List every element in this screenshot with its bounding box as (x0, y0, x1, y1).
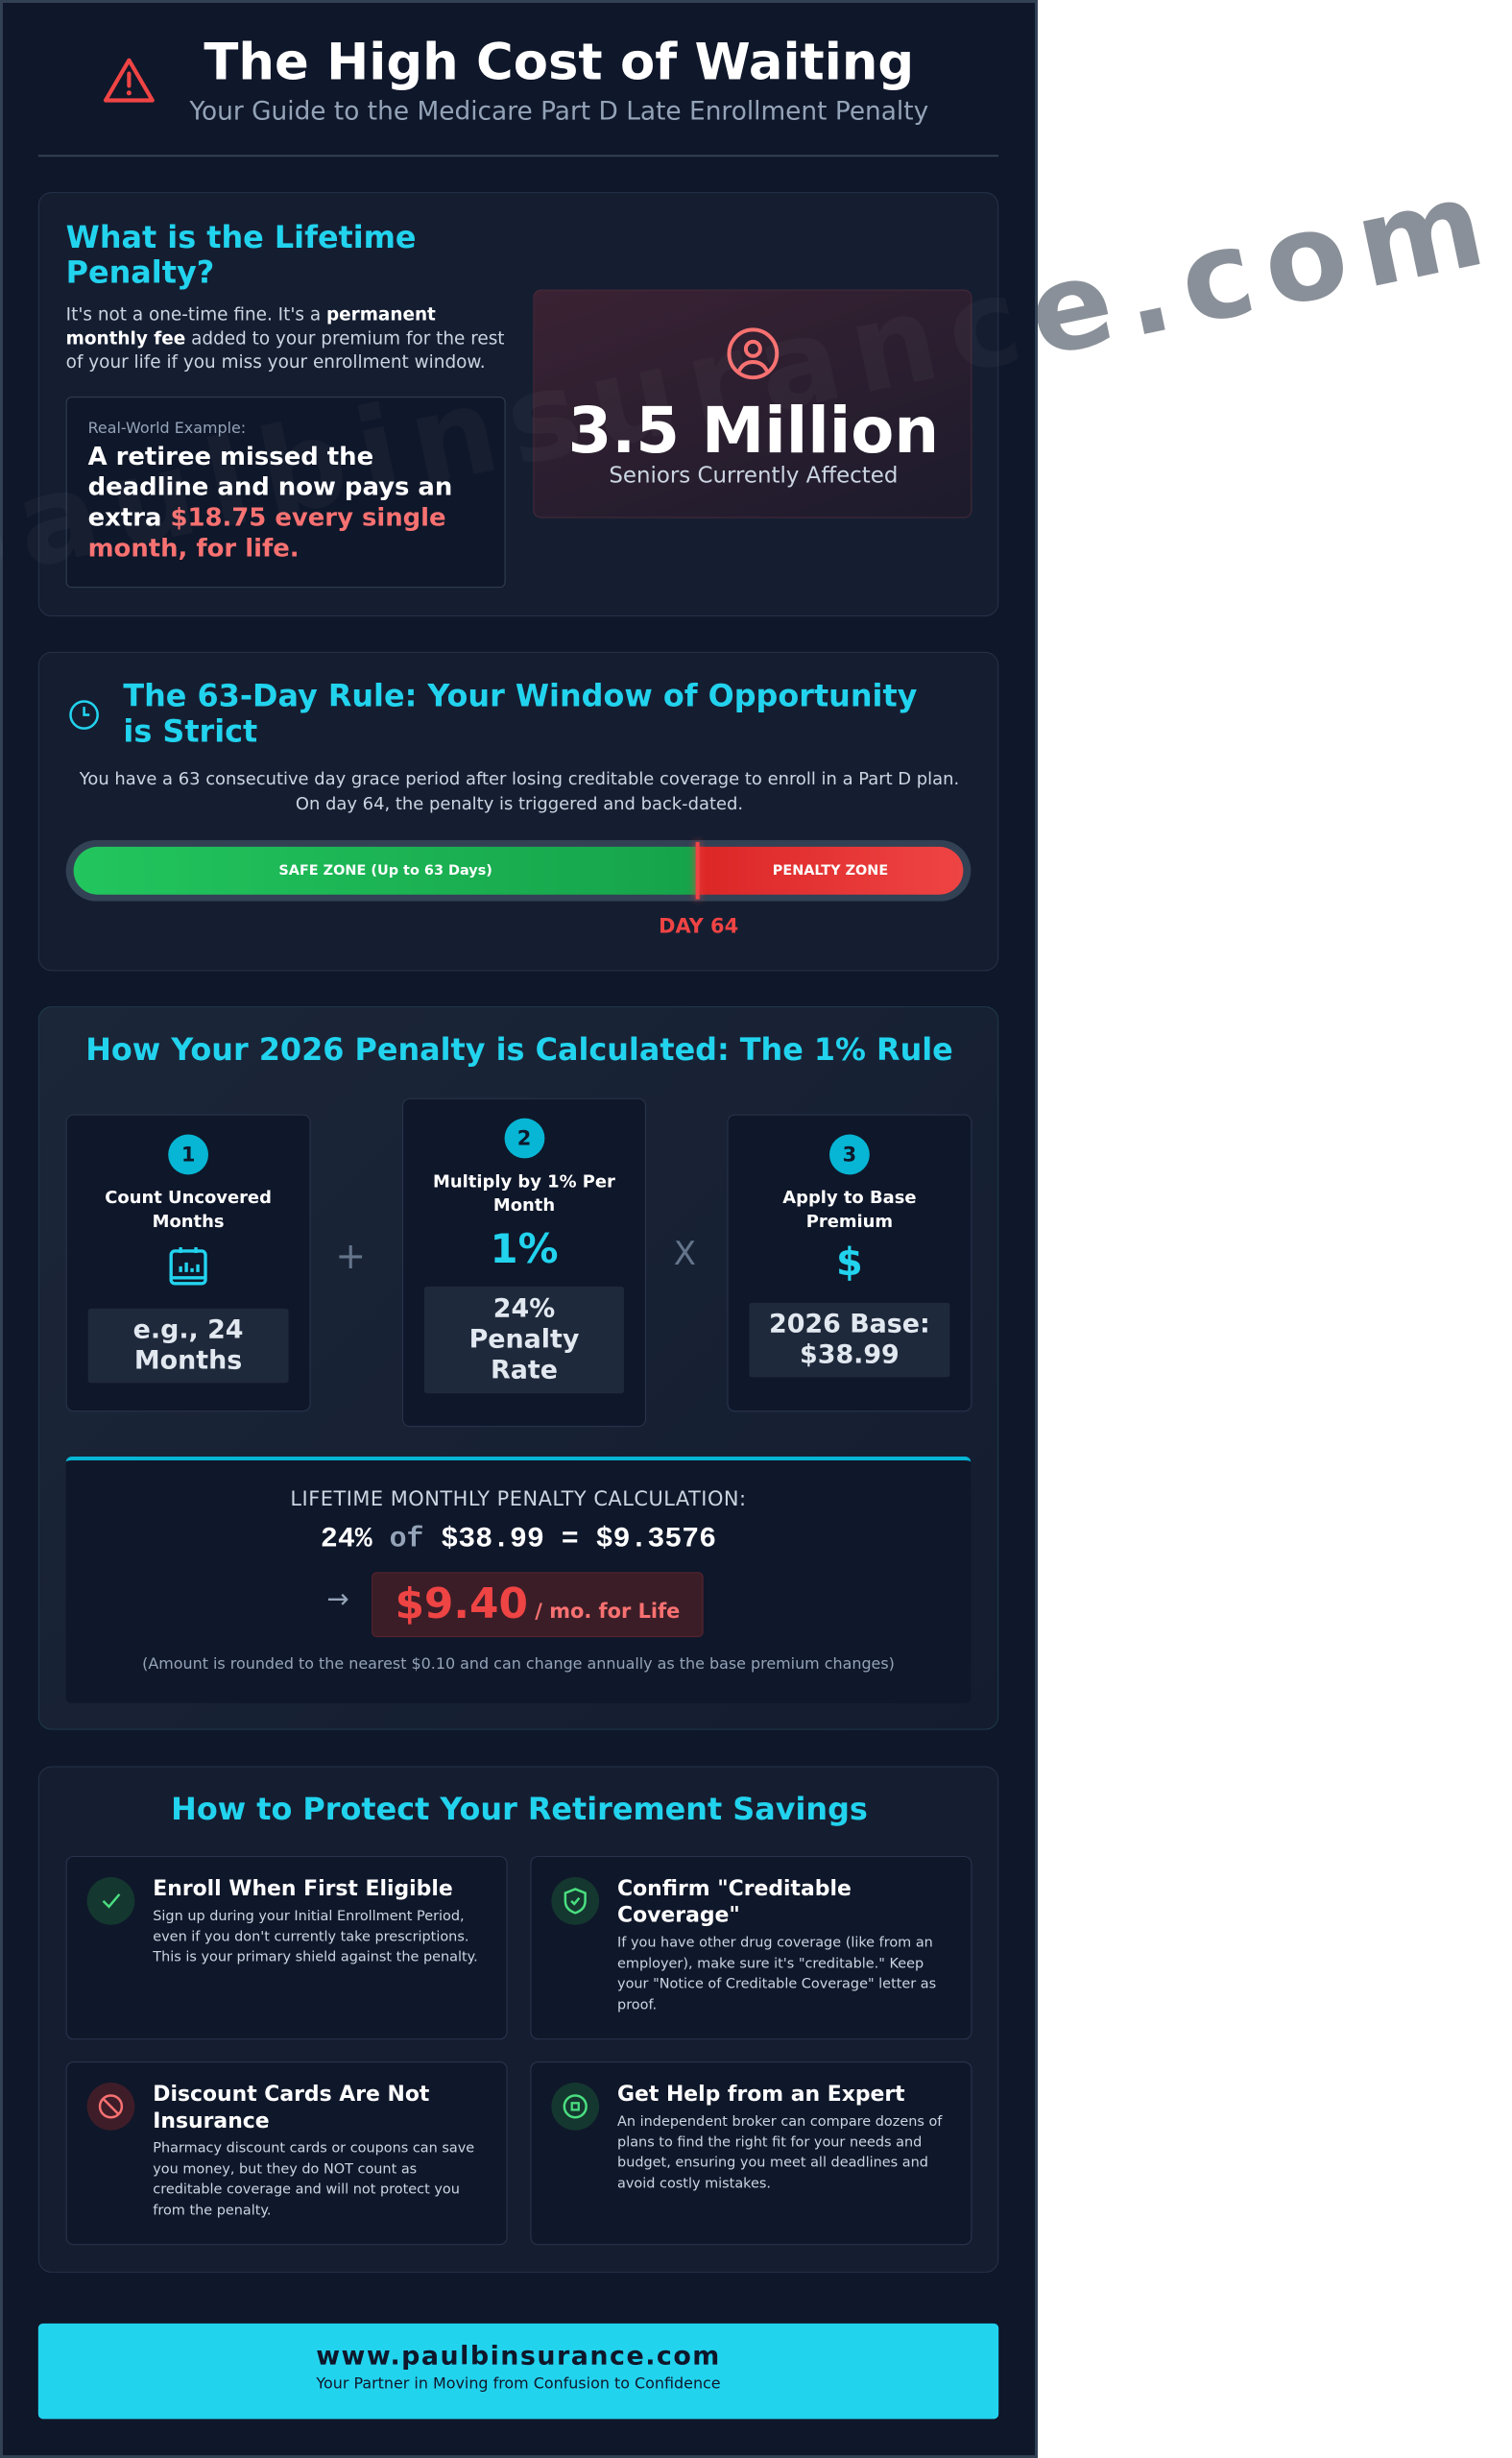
footer: Your Partner in Moving from Confusion to Confidence (316, 2374, 721, 2392)
callout: calculation result (66, 1457, 971, 1703)
icon: dollar: $ (836, 1241, 863, 1285)
step 2 (402, 1098, 646, 1427)
panel: protect savings (38, 1766, 998, 2273)
callout: calculation result: 24% of $38.99 = $9.3576 (321, 1524, 716, 1556)
panel: calculation (38, 1006, 998, 1730)
step 2: 1% (490, 1225, 558, 1272)
step 3: 2026 Base: (769, 1310, 930, 1339)
callout: example: Real-World Example: (88, 419, 246, 437)
callout: example (66, 397, 506, 588)
footer (38, 2324, 998, 2419)
footer: www.paulbinsurance.com (316, 2342, 721, 2372)
step 3: Apply to Base (782, 1188, 917, 1208)
step 3 (727, 1115, 972, 1411)
step 1: 1 (181, 1143, 195, 1166)
icon: warning triangle (104, 58, 155, 103)
step 3: $38.99 (800, 1340, 900, 1369)
icon: times: X (674, 1235, 696, 1273)
watermark (1038, 202, 1480, 350)
callout: calculation result: (Amount is rounded to the nearest $0.10 and can change annually as the base premium changes) (142, 1654, 895, 1673)
tip: creditable coverage (530, 1856, 972, 2039)
step 2: 24% (493, 1294, 555, 1324)
panel: 63-day rule (38, 652, 998, 971)
callout: example: A retiree missed the deadline and now pays an extra $18.75 every single month, for life. (88, 443, 452, 563)
icon: clock (69, 700, 99, 730)
stat box (533, 290, 972, 518)
chart: timeline bar: PENALTY ZONE (773, 863, 888, 879)
tip: expert (530, 2061, 972, 2245)
step 2: Penalty (469, 1325, 579, 1354)
main panel (0, 0, 1038, 2458)
text block (79, 769, 959, 814)
heading: The 63-Day Rule: Your Window of Opportunity is Strict (123, 678, 917, 749)
step 3: Premium (806, 1212, 893, 1232)
step 1: Months (134, 1346, 242, 1375)
heading: How Your 2026 Penalty is Calculated: The 1% Rule (85, 1031, 953, 1068)
tip: enroll: Sign up during your Initial Enrollment Period, even if you don't currently take prescriptions. This is your primary shield against the penalty. (153, 1909, 478, 1965)
chart: timeline bar (66, 840, 971, 902)
text block: It's not a one-time fine. It's a permanent monthly fee added to your premium for the rest of your life if you miss your enrollment window. (66, 305, 505, 373)
step 1 (66, 1115, 311, 1411)
text block: You have a 63 consecutive day grace period after losing creditable coverage to enroll in a Part D plan. (80, 769, 959, 789)
panel: lifetime penalty (38, 192, 998, 616)
icon: calendar chart (169, 1247, 207, 1285)
icon: plus: + (335, 1235, 366, 1277)
step 1: Count Uncovered (105, 1188, 272, 1208)
tip: creditable coverage: If you have other drug coverage (like from an employer), make sure it's "creditable." Keep your "Notice of Creditable Coverage" letter as proof. (617, 1936, 936, 2012)
icon: person (728, 327, 780, 380)
step 2: Multiply by 1% Per (433, 1171, 615, 1192)
tip: expert: An independent broker can compare dozens of plans to find the right fit for your needs and budget, ensuring you meet all deadlines and avoid costly mistakes. (617, 2114, 942, 2191)
subtitle: Your Guide to the Medicare Part D Late Enrollment Penalty (189, 97, 928, 126)
tip: discount cards (66, 2061, 508, 2245)
step 3: 3 (843, 1143, 856, 1166)
step 2: Month (493, 1195, 555, 1216)
step 1: e.g., 24 (133, 1315, 244, 1345)
title: The High Cost of Waiting (204, 34, 914, 92)
tip: discount cards: Discount Cards Are Not Insurance (153, 2083, 429, 2133)
callout: calculation result: → (326, 1582, 349, 1614)
callout: calculation result: LIFETIME MONTHLY PENALTY CALCULATION: (290, 1487, 747, 1510)
tip: enroll: Enroll When First Eligible (153, 1877, 453, 1901)
tip: creditable coverage: Confirm "Creditable Coverage" (617, 1877, 852, 1928)
tip: enroll (66, 1856, 508, 2039)
step 1: Months (153, 1212, 225, 1232)
heading: How to Protect Your Retirement Savings (171, 1791, 868, 1827)
tip: discount cards: Pharmacy discount cards or coupons can save you money, but they do NOT count as creditable coverage and will not protect you from the penalty. (153, 2141, 474, 2218)
stat box: Seniors Currently Affected (609, 464, 898, 489)
text block: On day 64, the penalty is triggered and back-dated. (296, 794, 743, 814)
label: day 64: DAY 64 (659, 915, 738, 937)
callout: calculation result: $9.40 / mo. for Life (395, 1579, 680, 1628)
step 2: 2 (517, 1127, 531, 1149)
heading: What is the Lifetime Penalty? (66, 219, 416, 291)
stat box: 3.5 Million (568, 394, 939, 468)
tip: expert: Get Help from an Expert (617, 2083, 905, 2107)
chart: timeline bar: SAFE ZONE (Up to 63 Days) (278, 863, 492, 879)
step 2: Rate (491, 1355, 558, 1385)
